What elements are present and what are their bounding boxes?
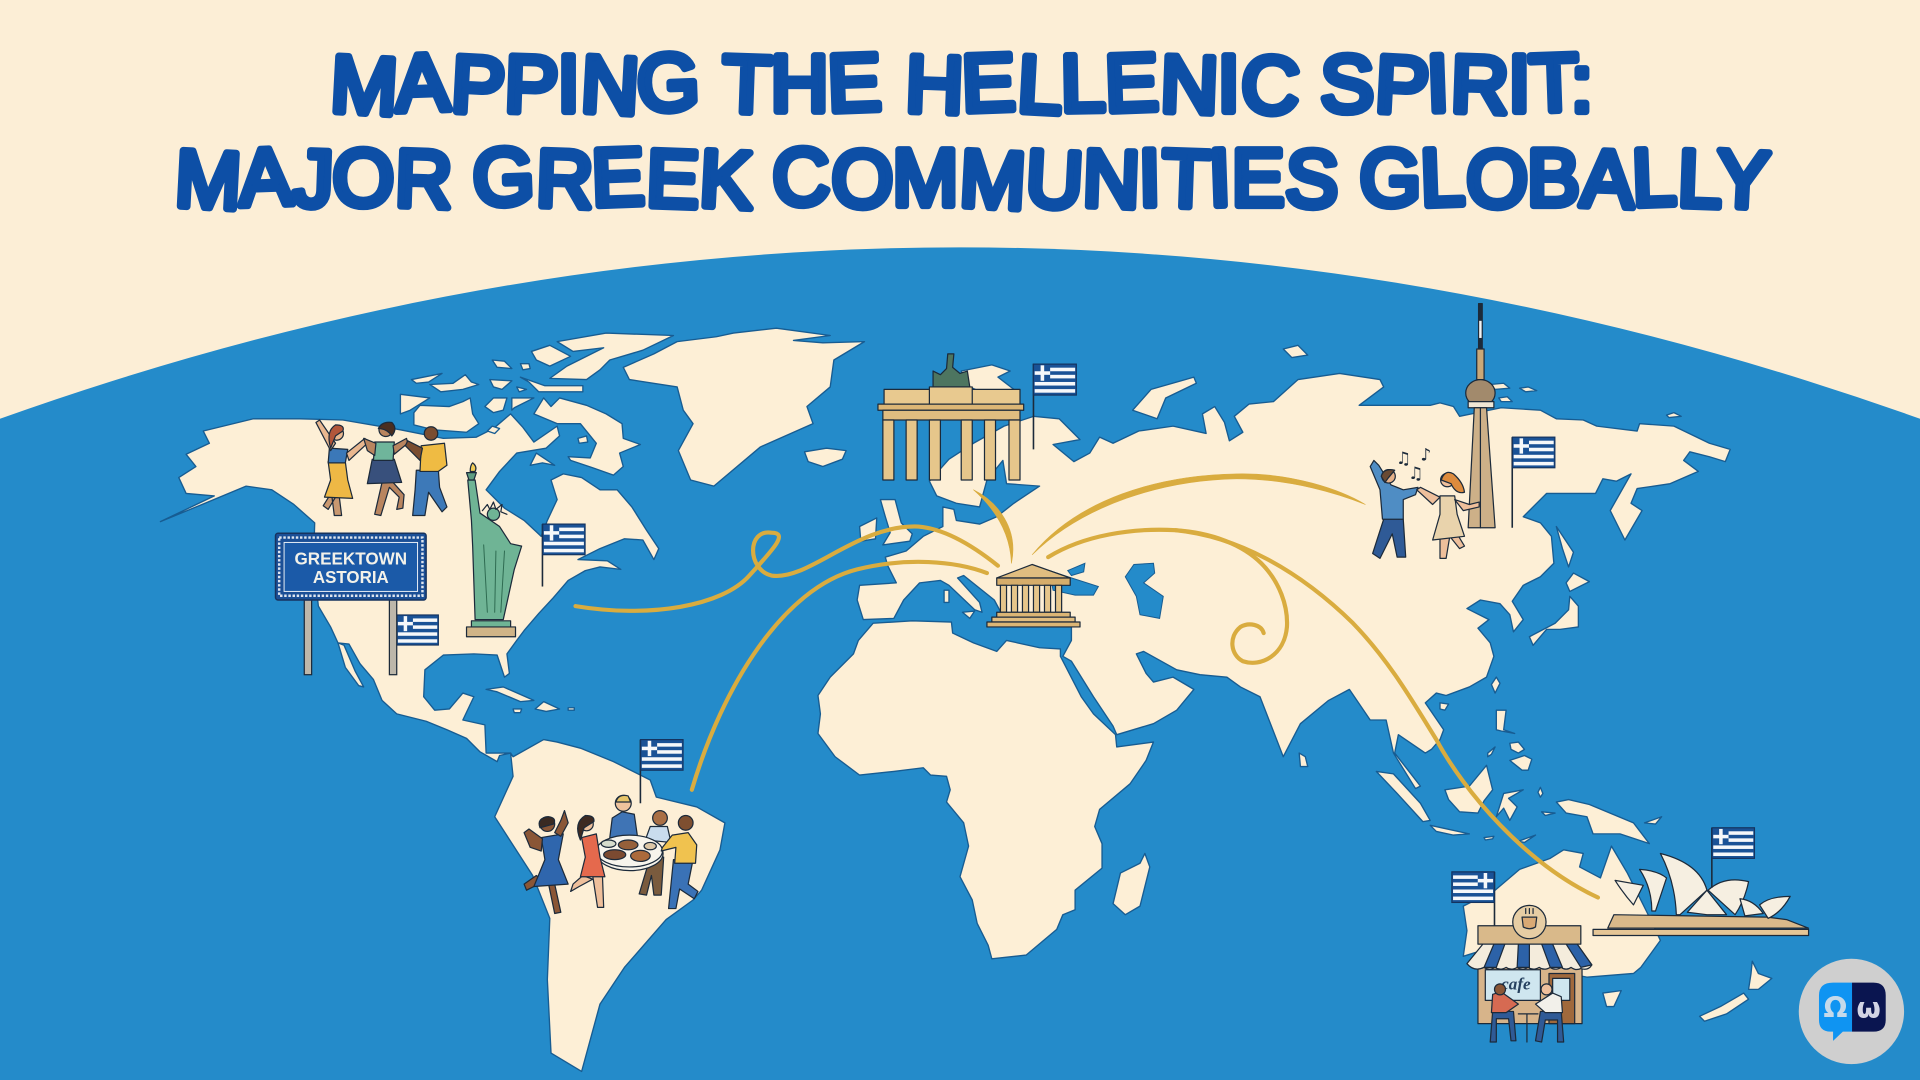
Novaya Zemlya <box>1133 377 1196 419</box>
Ireland <box>860 518 877 541</box>
icon: Brandenburg Gate <box>878 354 1024 480</box>
route to North America <box>576 526 998 611</box>
Arctic: Baffin Island <box>534 398 640 475</box>
Arctic: Devon Island <box>531 345 571 366</box>
Java <box>1430 825 1469 835</box>
Sea of Azov <box>1068 563 1085 576</box>
Sicily <box>962 611 975 618</box>
Tasmania <box>1603 991 1621 1007</box>
seated woman <box>1490 984 1518 1042</box>
ocean globe <box>0 247 1920 1080</box>
Lesser Sunda islands <box>1518 835 1536 842</box>
music notes: ♫ <box>1396 449 1411 469</box>
spiral route <box>1048 530 1287 663</box>
Sumatra <box>1376 771 1430 822</box>
Mindanao <box>1510 756 1532 770</box>
Honshu <box>1529 596 1578 645</box>
Siberian islands <box>1283 345 1308 358</box>
icon: Sydney Opera House <box>1593 853 1809 936</box>
icon: CN Tower <box>1466 304 1495 528</box>
Arctic: Southampton Island <box>530 453 555 465</box>
Sri Lanka <box>1299 753 1308 767</box>
icon: Parthenon <box>987 564 1080 627</box>
Africa <box>818 621 1153 959</box>
Baja California <box>338 643 364 687</box>
dancing couple <box>1370 445 1479 558</box>
New Zealand <box>1749 961 1772 989</box>
flag: Astoria marker <box>397 615 438 645</box>
man <box>1370 460 1418 558</box>
New Guinea <box>1556 800 1649 844</box>
Arctic: small islands <box>411 373 442 383</box>
Hokkaido <box>1566 573 1589 591</box>
Black Sea <box>1049 571 1098 595</box>
flag: Russia marker <box>1512 437 1555 528</box>
man in yellow shirt <box>661 816 698 909</box>
dancer in blue dress <box>524 811 568 913</box>
route to Germany <box>973 490 1013 563</box>
Sardinia and Corsica <box>944 590 949 602</box>
Great Britain <box>880 500 912 545</box>
Jamaica <box>513 709 522 713</box>
cafe lettering: cafe <box>1501 974 1531 993</box>
table <box>596 835 663 871</box>
route to South America <box>692 562 987 790</box>
South America <box>495 740 725 1071</box>
seated man <box>1536 984 1564 1042</box>
Visayas <box>1510 742 1524 753</box>
North American dancers <box>316 420 447 516</box>
Madagascar <box>1113 853 1150 915</box>
woman <box>1417 472 1479 558</box>
Greektown Astoria sign <box>276 533 426 675</box>
Arctic: Banks Island <box>400 394 430 414</box>
Australia <box>1463 846 1660 977</box>
dancer in coral dress <box>571 816 605 907</box>
Hainan <box>1440 703 1449 710</box>
Iceland <box>804 448 846 467</box>
Arctic: Ellesmere Island <box>550 333 673 380</box>
Greenland <box>623 328 864 486</box>
title: MAPPING THE HELLENIC SPIRIT: <box>328 37 1593 133</box>
Puerto Rico <box>568 708 574 710</box>
Sakhalin <box>1556 527 1573 567</box>
flag: Melbourne marker <box>1452 872 1494 926</box>
Sulawesi <box>1496 790 1523 820</box>
Eurasia <box>857 373 1730 789</box>
music notes <box>1396 445 1431 484</box>
Palawan <box>1488 747 1495 757</box>
Hudson Bay islands <box>578 436 588 443</box>
table <box>1518 1014 1538 1042</box>
standing man blue shirt <box>610 795 638 840</box>
icon: cafe <box>1467 905 1592 1042</box>
world map <box>160 328 1772 1071</box>
route to Australia <box>1176 530 1598 898</box>
man light shirt brown trousers <box>639 811 671 895</box>
flag: Sydney marker <box>1712 828 1754 888</box>
route to Canada <box>1032 474 1365 555</box>
flag: Brazil marker <box>640 740 683 803</box>
logo badge <box>1799 959 1904 1064</box>
dancer in yellow skirt <box>316 420 367 516</box>
North America <box>160 414 659 762</box>
Taiwan <box>1491 677 1500 693</box>
man in yellow shirt <box>405 427 447 516</box>
Borneo <box>1445 765 1493 813</box>
Greektown Astoria sign: ASTORIA <box>313 567 389 587</box>
Svalbard <box>961 365 1014 394</box>
logo badge: Ω <box>1824 992 1848 1025</box>
music notes: ♪ <box>1420 445 1431 465</box>
logo badge: ω <box>1856 992 1881 1025</box>
flag: New York marker <box>542 524 585 587</box>
Brazil community dinner <box>524 795 698 913</box>
Greektown Astoria sign: GREEKTOWN <box>294 548 407 568</box>
Luzon <box>1496 710 1515 733</box>
music notes: ♫ <box>1408 464 1424 484</box>
icon: Statue of Liberty <box>467 463 522 637</box>
title: MAJOR GREEK COMMUNITIES GLOBALLY <box>173 132 1772 227</box>
Caspian Sea <box>1125 563 1163 618</box>
dancer in navy skirt <box>364 422 408 516</box>
Cuba <box>486 687 534 702</box>
flag: Germany marker <box>1033 364 1076 449</box>
migration routes <box>576 474 1598 898</box>
title <box>173 37 1772 227</box>
Hispaniola <box>535 702 560 711</box>
Halmahera <box>1538 787 1543 797</box>
Arctic: Victoria Island <box>414 398 479 432</box>
